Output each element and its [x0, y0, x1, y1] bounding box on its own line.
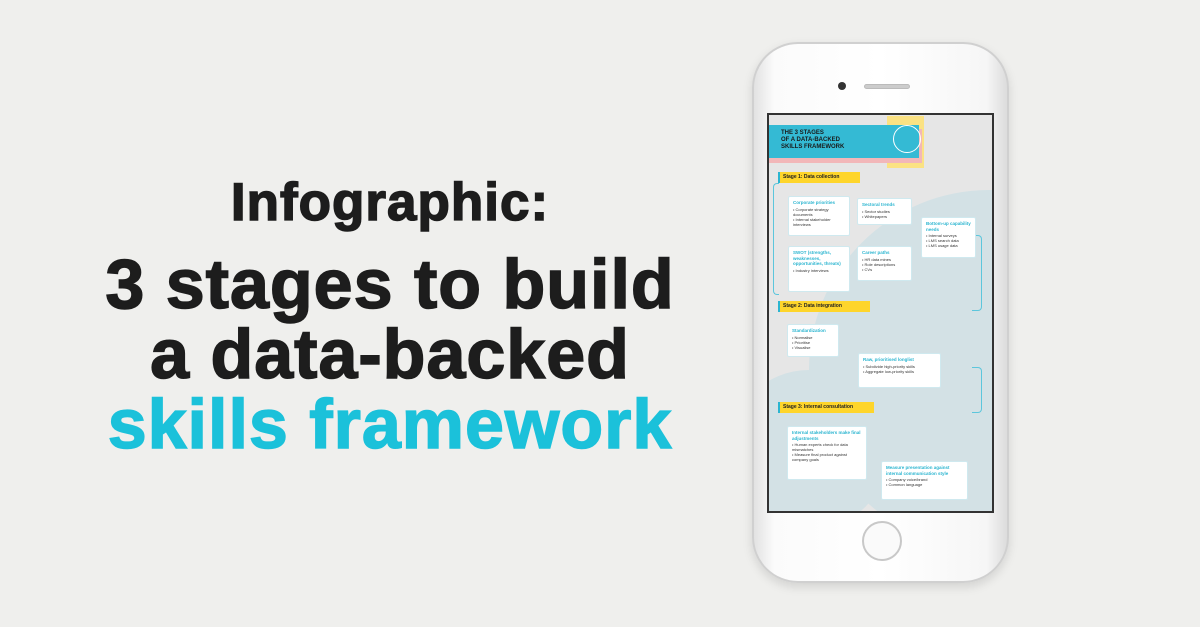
- title banner: OF A DATA-BACKED: [781, 137, 840, 143]
- stage 3: [778, 402, 874, 413]
- phone screen: • Company voice/brand: [886, 477, 927, 482]
- heading: main title: [105, 245, 675, 463]
- phone screen: • LMS search data: [926, 238, 959, 243]
- phone screen: • Visualise: [792, 344, 810, 350]
- phone screen: Career paths: [862, 250, 890, 255]
- phone screen: Internal stakeholders make final adjustments: [792, 430, 861, 440]
- heading: main title: skills framework: [108, 385, 672, 463]
- title banner: [769, 125, 919, 158]
- icon: camera: [838, 82, 846, 90]
- stage 1: [778, 172, 860, 183]
- stage 2: [778, 301, 870, 312]
- boxes stage 1: [788, 196, 850, 236]
- title banner: SKILLS FRAMEWORK: [781, 144, 844, 150]
- stage 2: Stage 2: Data integration: [783, 303, 842, 309]
- phone screen: • LMS usage data: [926, 243, 958, 248]
- phone screen: Raw, prioritised longlist: [863, 357, 914, 362]
- phone screen: Measure presentation against internal communication style: [886, 465, 950, 476]
- phone screen: • Role descriptions: [862, 262, 895, 266]
- boxes stage 1: • Internal stakeholder interviews: [793, 216, 831, 226]
- icon: speaker: [864, 84, 910, 89]
- boxes stage 1: • Corporate strategy documents: [793, 206, 829, 216]
- phone screen: • Normalise: [792, 334, 813, 340]
- phone screen: • Human experts check for data mismatches: [792, 442, 848, 452]
- phone screen: SWOT (strengths, weaknesses, opportunities, threats): [793, 250, 841, 266]
- phone screen: • Aggregate low-priority skills: [863, 368, 914, 374]
- phone screen: • HR data mines: [862, 256, 891, 262]
- phone screen: • Common language: [886, 482, 922, 487]
- boxes stage 1: Corporate priorities: [793, 200, 835, 205]
- stage 1: Stage 1: Data collection: [783, 174, 839, 180]
- phone screen: • Industry interviews: [793, 268, 829, 272]
- phone screen: • Subdivide high-priority skills: [863, 364, 915, 368]
- title banner: THE 3 STAGES: [781, 130, 824, 136]
- phone screen: Bottom-up capability needs: [926, 221, 971, 232]
- phone screen: • Sector studies: [862, 208, 890, 214]
- phone: [752, 42, 1009, 583]
- phone screen: [767, 113, 994, 513]
- phone screen: • CVs: [862, 266, 872, 272]
- heading: main title: 3 stages to build: [105, 245, 675, 323]
- heading: Infographic: Infographic:: [231, 173, 549, 232]
- phone screen: • Measure final product against company goals: [792, 452, 847, 462]
- icon: home button: [862, 521, 902, 561]
- phone screen: • Prioritise: [792, 340, 810, 344]
- stage 3: Stage 3: Internal consultation: [783, 404, 853, 410]
- phone screen: • Whitepapers: [862, 214, 887, 218]
- phone screen: • Internal surveys: [926, 233, 957, 238]
- heading: main title: a data-backed: [150, 315, 630, 393]
- phone screen: Standardization: [792, 328, 826, 333]
- phone screen: Sectoral trends: [862, 202, 895, 207]
